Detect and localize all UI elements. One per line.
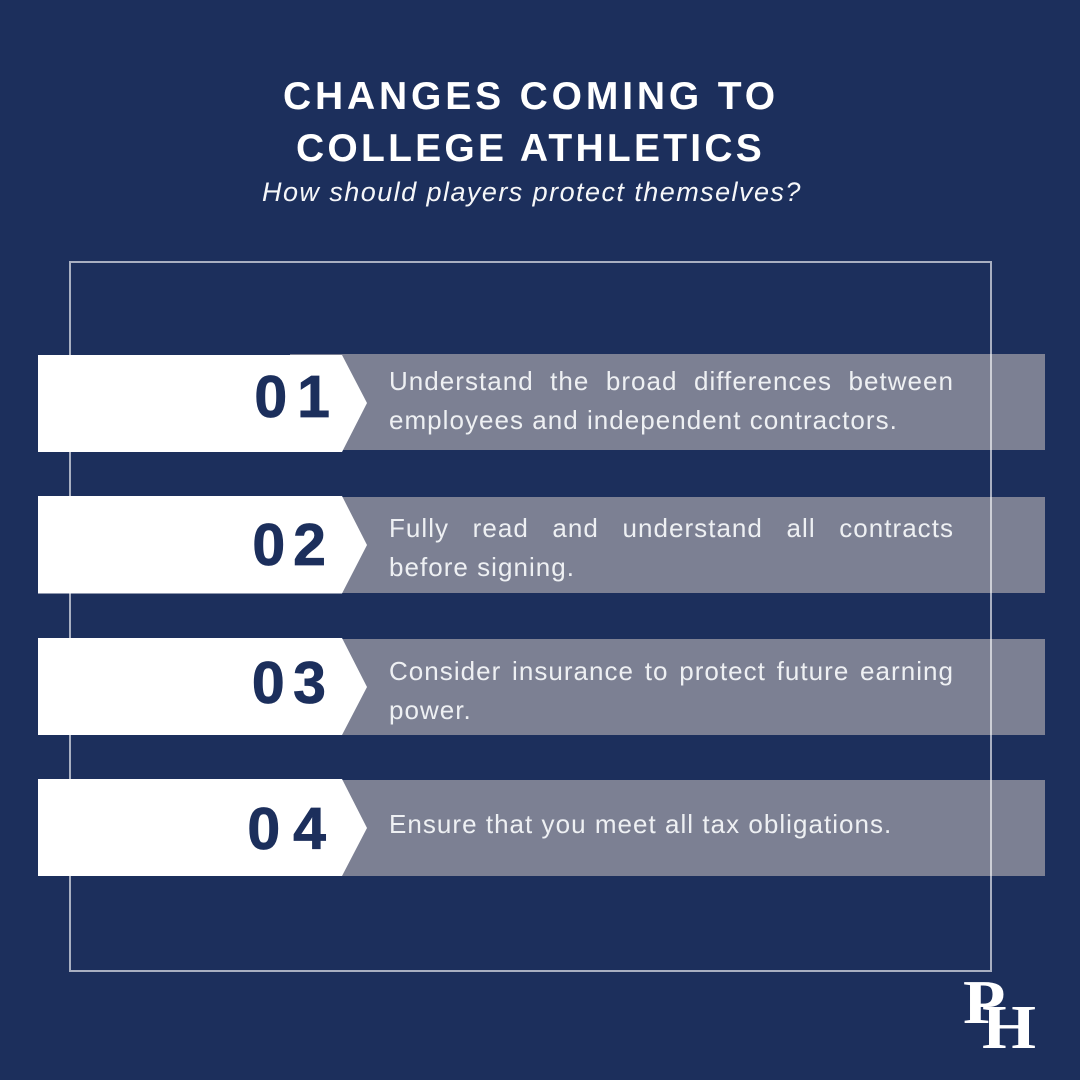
white number tab 03 <box>38 638 367 735</box>
frame outline <box>69 261 992 972</box>
title: CHANGES COMING TO <box>283 75 779 118</box>
grey text bar 01 <box>290 354 1045 450</box>
text 03: power. <box>389 695 472 725</box>
logo: PH monogram: P <box>963 969 1005 1037</box>
text 01 <box>389 366 954 435</box>
panel: item 04 <box>38 779 1045 876</box>
title: COLLEGE ATHLETICS <box>296 127 765 170</box>
number 01: 01 <box>254 364 330 430</box>
text 02 <box>389 513 954 582</box>
panel: item 03 <box>38 638 1045 735</box>
grey text bar 04 <box>290 780 1045 876</box>
number 02: 02 <box>252 512 334 578</box>
white number tab 02 <box>38 496 367 594</box>
text 03: Consider insurance to protect future earning <box>389 656 954 686</box>
text 01: Understand the broad differences between <box>389 366 954 396</box>
panel: item 02 <box>38 496 1045 594</box>
number 03: 03 <box>252 650 334 716</box>
white number tab 01 <box>38 355 367 452</box>
logo: PH monogram: H <box>982 994 1036 1062</box>
logo: PH monogram <box>963 969 1036 1062</box>
subtitle: How should players protect themselves? <box>262 177 802 207</box>
grey text bar 02 <box>290 497 1045 593</box>
grey text bar 03 <box>290 639 1045 735</box>
text 01: employees and independent contractors. <box>389 405 898 435</box>
text 02: before signing. <box>389 552 575 582</box>
text 02: Fully read and understand all contracts <box>389 513 954 543</box>
number 04: 04 <box>247 796 339 862</box>
text 04: Ensure that you meet all tax obligations. <box>389 809 892 839</box>
panel: item 01 <box>38 354 1045 452</box>
white number tab 04 <box>38 779 367 876</box>
text 03 <box>389 656 954 725</box>
title <box>283 75 779 170</box>
